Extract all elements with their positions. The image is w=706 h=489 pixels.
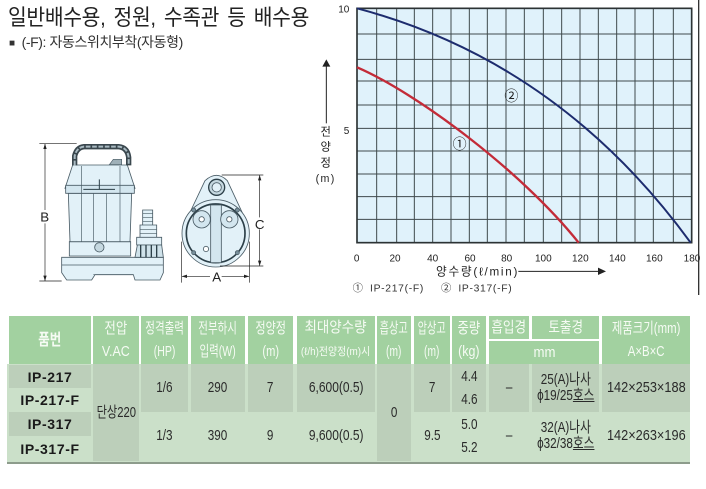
table bottom rule bbox=[7, 462, 690, 464]
header row: mm bbox=[533, 344, 555, 361]
x axis title: 양수량(ℓ/min) bbox=[436, 265, 517, 278]
header row: (ℓ/h)전양정(m)시 bbox=[301, 346, 371, 358]
y axis tick labels: 5 bbox=[344, 126, 350, 137]
legend: IP-317(-F) bbox=[458, 284, 512, 295]
header row: 전부하시 bbox=[199, 320, 237, 337]
curve labels: ② bbox=[504, 88, 518, 104]
model names: IP-317-F bbox=[20, 440, 80, 456]
header row: 토출경 bbox=[548, 319, 583, 336]
plot background bbox=[357, 8, 692, 243]
x axis tick labels: 20 bbox=[389, 254, 401, 265]
table values: 290 bbox=[208, 379, 228, 396]
header row: 품번 bbox=[39, 332, 61, 348]
curve labels: ① bbox=[453, 136, 467, 152]
legend: IP-217(-F) bbox=[370, 284, 423, 295]
y axis arrow bbox=[322, 59, 330, 123]
header row: 흡입경 bbox=[492, 319, 526, 336]
pump side view bbox=[62, 147, 163, 280]
table values: ϕ32/38호스 bbox=[537, 435, 594, 452]
header row: 중량 bbox=[458, 320, 480, 337]
model names: IP-217-F bbox=[20, 392, 80, 408]
x axis tick labels: 80 bbox=[501, 254, 513, 265]
header row: (m) bbox=[386, 343, 402, 360]
x axis tick labels: 0 bbox=[354, 254, 360, 265]
header row: 최대양수량 bbox=[305, 319, 367, 336]
curve 2 bbox=[357, 8, 691, 243]
x axis tick labels: 160 bbox=[646, 254, 663, 265]
header row: V.AC bbox=[102, 343, 130, 360]
dimension lines bbox=[39, 144, 263, 283]
y axis title: 양 bbox=[320, 141, 331, 154]
performance chart bbox=[316, 0, 701, 295]
right border line bbox=[698, 0, 699, 295]
y axis title: (m) bbox=[316, 173, 336, 185]
x axis tick labels: 140 bbox=[609, 254, 626, 265]
header row: (HP) bbox=[154, 343, 175, 360]
table values: 7 bbox=[429, 379, 435, 396]
table values: 5.0 bbox=[461, 416, 477, 433]
table values: 142×253×188 bbox=[607, 379, 685, 396]
x axis tick labels: 40 bbox=[427, 254, 439, 265]
y axis tick labels: 10 bbox=[338, 5, 350, 16]
table values: 9 bbox=[267, 427, 274, 444]
title: 일반배수용, 정원, 수족관 등 배수용 bbox=[8, 5, 309, 30]
table values: 390 bbox=[208, 427, 228, 444]
dimension labels: C bbox=[255, 217, 265, 232]
table values: 9,600(0.5) bbox=[309, 427, 363, 444]
x axis tick labels bbox=[354, 254, 701, 265]
dimension labels: A bbox=[212, 270, 221, 285]
header row: (kg) bbox=[458, 343, 480, 360]
x axis tick labels: 180 bbox=[684, 254, 701, 265]
pump dimension diagram bbox=[39, 143, 265, 285]
y axis title: 전 bbox=[320, 126, 331, 139]
table values: 5.2 bbox=[461, 439, 477, 456]
header row: 압상고 bbox=[418, 320, 446, 337]
y axis tick labels bbox=[338, 5, 350, 137]
header row: 정격출력 bbox=[145, 320, 184, 337]
header row: 전압 bbox=[105, 320, 127, 337]
table values: 1/3 bbox=[156, 427, 173, 444]
table values: 25(A)나사 bbox=[540, 371, 591, 388]
table values: – bbox=[506, 379, 512, 396]
x axis tick labels: 60 bbox=[464, 254, 476, 265]
table values: 4.4 bbox=[461, 368, 477, 385]
table values: 단상220 bbox=[96, 404, 136, 420]
x axis arrow bbox=[518, 268, 606, 275]
header row: (m) bbox=[424, 343, 440, 360]
legend bbox=[353, 283, 512, 295]
header row: (m) bbox=[262, 343, 279, 360]
header row: 정양정 bbox=[255, 320, 286, 337]
table values: 4.6 bbox=[461, 391, 477, 408]
dimension labels: B bbox=[40, 209, 49, 224]
table values: – bbox=[506, 427, 512, 444]
table values: ϕ19/25호스 bbox=[537, 387, 594, 404]
y axis title: 정 bbox=[320, 156, 331, 169]
header row: 제품크기(mm) bbox=[612, 320, 680, 337]
x axis tick labels: 100 bbox=[535, 254, 552, 265]
grid bbox=[357, 8, 692, 243]
curve 1 bbox=[357, 67, 579, 243]
header row bbox=[9, 316, 690, 364]
subtitle note: ■ (-F): 자동스위치부착(자동형) bbox=[9, 34, 183, 50]
table values: 7 bbox=[267, 379, 274, 396]
table values: 1/6 bbox=[156, 379, 173, 396]
table values: 6,600(0.5) bbox=[309, 379, 363, 396]
table body background bbox=[7, 364, 690, 462]
table values: 0 bbox=[391, 404, 397, 420]
dimension labels bbox=[40, 209, 265, 285]
header row: A×B×C bbox=[628, 343, 664, 360]
model names: IP-217 bbox=[28, 368, 72, 384]
header row: 흡상고 bbox=[380, 320, 408, 337]
x axis tick labels: 120 bbox=[572, 254, 589, 265]
legend: ② bbox=[441, 283, 451, 295]
y axis title bbox=[316, 126, 336, 185]
table values: 9.5 bbox=[424, 427, 440, 444]
curve labels bbox=[453, 88, 518, 152]
table values: 32(A)나사 bbox=[540, 419, 591, 436]
header row: 입력(W) bbox=[200, 343, 236, 360]
table values: 142×263×196 bbox=[607, 427, 685, 444]
legend: ① bbox=[353, 283, 363, 295]
model names: IP-317 bbox=[28, 416, 72, 432]
pump bottom view bbox=[182, 175, 249, 267]
